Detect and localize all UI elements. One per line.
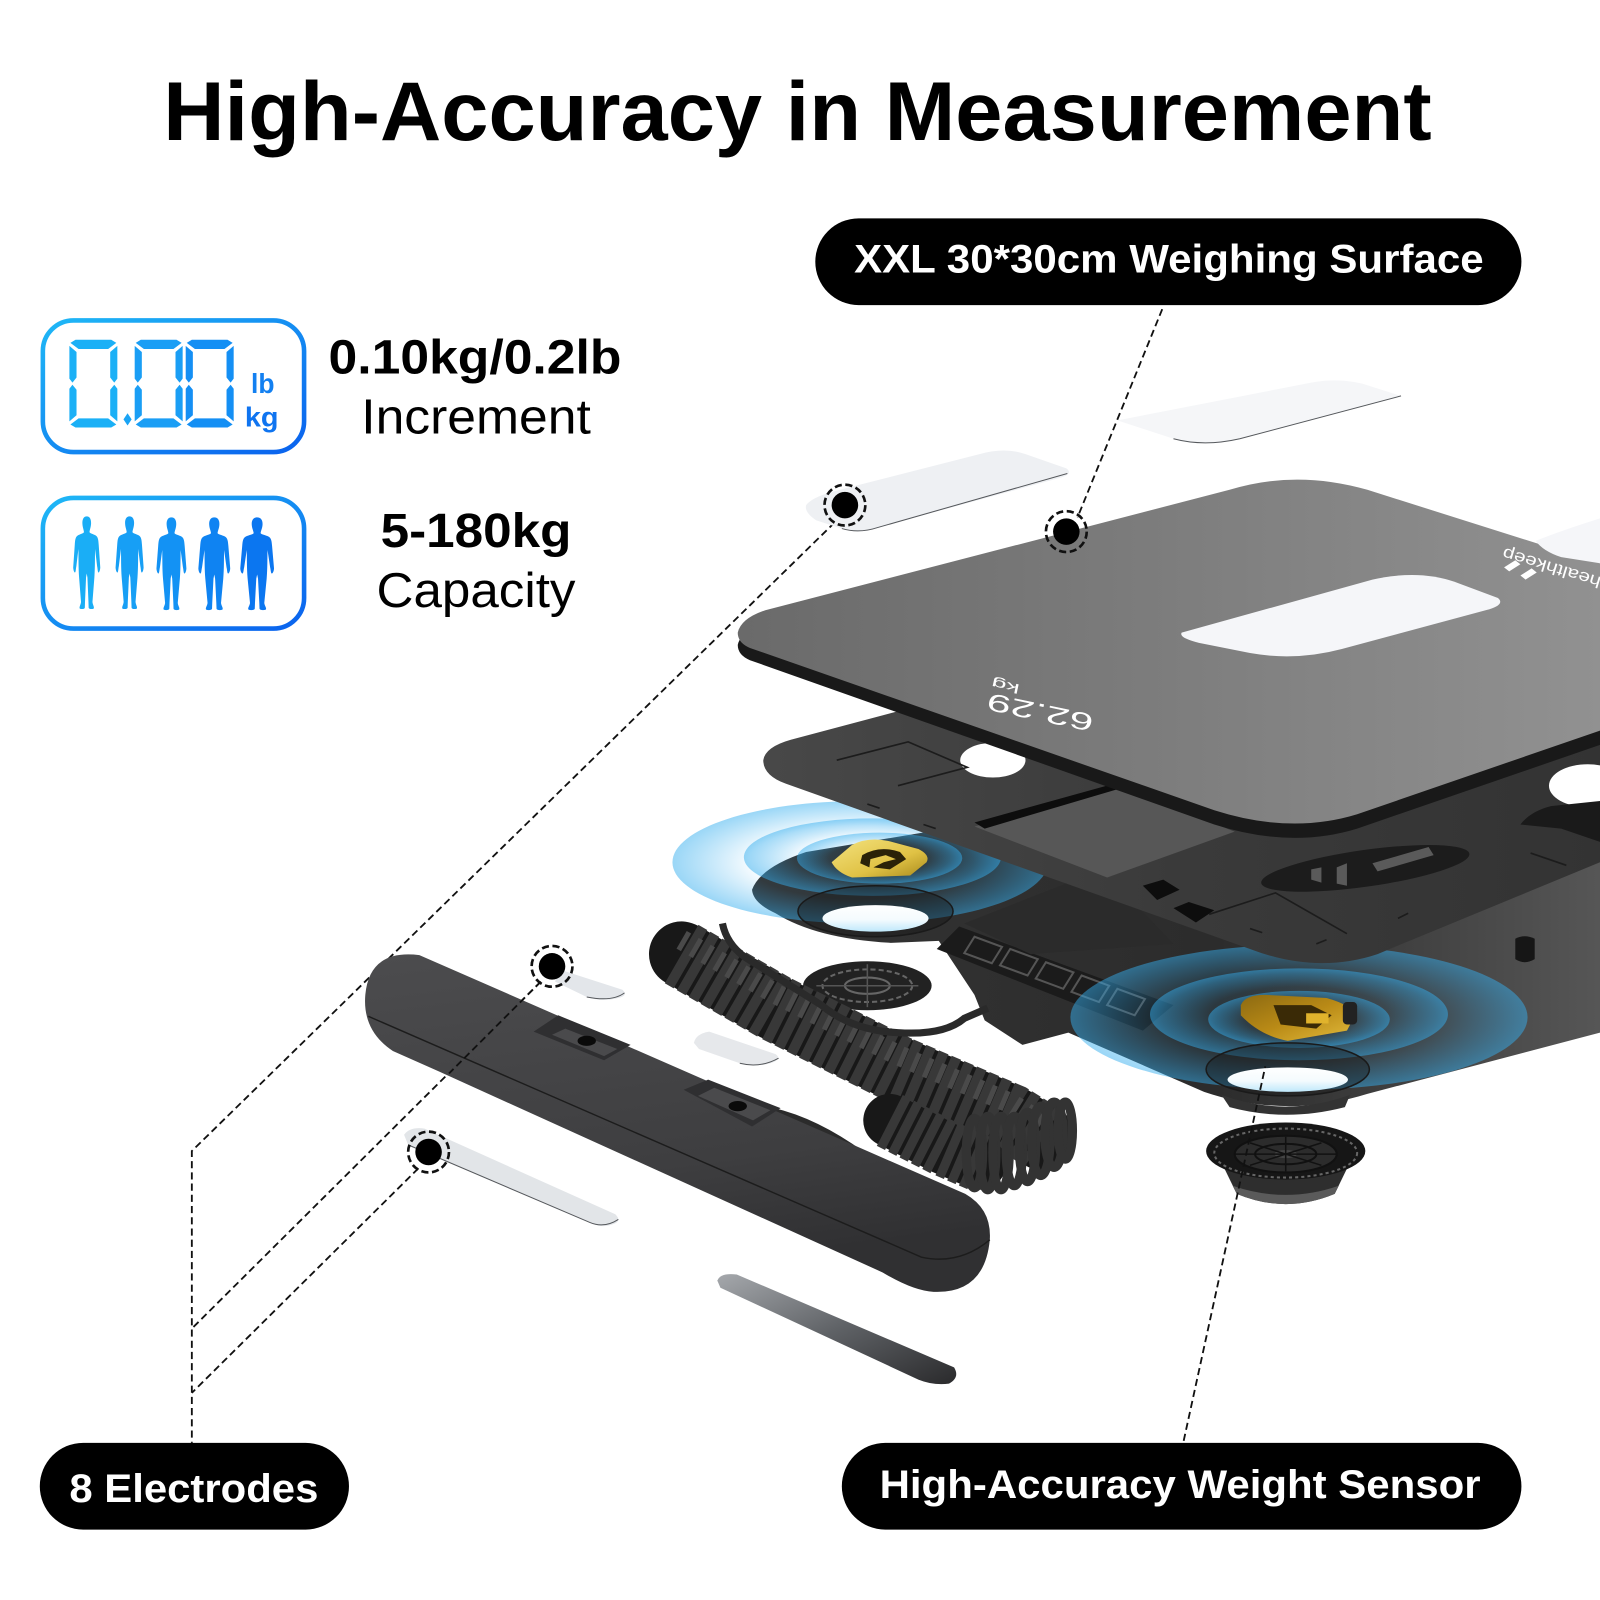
LCD module [937,869,1173,1031]
white right window [1536,518,1600,563]
blue signal rings: left sensor [672,801,1048,923]
handle electrode: small pad middle [694,1032,779,1065]
marker: handle upper [532,946,572,987]
slider button bottom [684,1080,781,1127]
icon: five body shapes [43,498,304,629]
marker: left pad [824,485,865,526]
text: capacity: 5-180kg [381,505,571,558]
pill: weight sensor: High-Accuracy Weight Sensor [880,1463,1481,1507]
text: capacity: Capacity [377,564,576,618]
recess window [974,786,1235,878]
electrode: top pad [1117,380,1401,443]
second foot behind base [803,961,932,1010]
pill: weight sensor [842,1443,1521,1530]
plate hole left [960,743,1026,778]
icon: digital display 0.00 lb kg: lb [251,368,274,399]
gold sensor: right [1241,995,1357,1041]
holes in base [798,886,1369,1115]
text: capacity [377,505,576,618]
kg unit: kg [990,676,1021,696]
scale base plate [752,816,1600,1106]
middle plate [763,711,1600,963]
pill: weighing surface [815,218,1521,305]
electrode: left pad [806,451,1069,531]
plate outlines [837,742,1566,944]
title: High-Accuracy in Measurement [163,64,1432,158]
leader line over handle [449,982,541,1073]
gold sensor: left [832,839,928,878]
slider button top [534,1015,631,1060]
leader lines [192,309,1162,1443]
icon: digital display 0.00 lb kg: kg [245,402,279,433]
coiled cable [682,923,1072,1190]
electrode: long dark strip [717,1274,956,1384]
text: increment: 0.10kg/0.2lb [329,331,621,384]
square vents [1143,880,1214,922]
post [1515,936,1535,962]
loose cable [722,923,988,1033]
pill: electrodes [40,1443,349,1530]
text: increment: Increment [361,391,591,445]
text: increment [329,331,621,445]
weight readout: 62.29 [985,687,1096,736]
foot [1206,1122,1365,1204]
glass top plate [738,480,1600,838]
marker: glass plate [1046,511,1087,552]
pill: electrodes: 8 Electrodes [69,1467,318,1511]
black slot [974,784,1122,829]
blue signal rings: right sensor [1070,945,1528,1090]
handle electrode: small pad upper [555,969,625,1000]
electrode: long silver strip [404,1128,618,1226]
leader line to weight sensor [1184,1066,1265,1441]
marker: handle lower [408,1132,449,1172]
icon: digital display 0.00 lb kg [43,320,304,452]
handle bar [365,954,990,1292]
coil lower run [890,1120,980,1163]
white center window [1181,575,1500,656]
foot icon [1504,560,1537,580]
coil main run [682,940,1043,1138]
right cutout [1520,801,1600,842]
pill: weighing surface: XXL 30*30cm Weighing Surface [854,237,1484,281]
coil end loops [966,1102,1072,1190]
mechanism slot [1259,836,1472,901]
plate hole right [1549,764,1600,807]
